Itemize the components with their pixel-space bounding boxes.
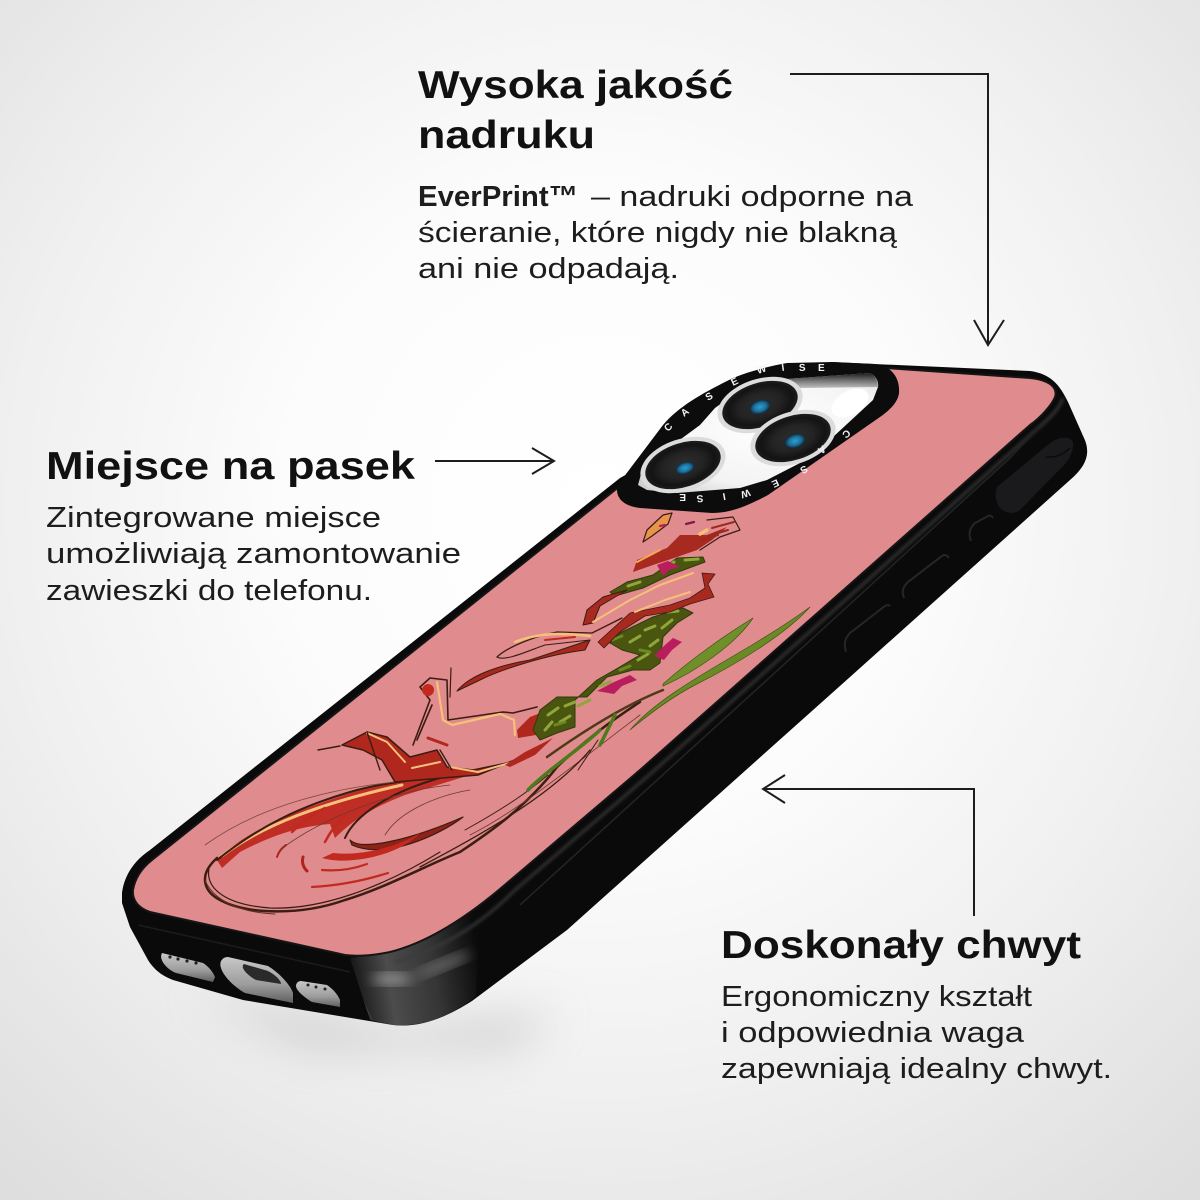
phone shadow [190,995,560,1048]
window inner shadow [740,373,878,395]
body text: zapewniają idealny chwyt. [721,1053,1112,1085]
phone case [122,362,1087,1030]
body text: – nadruki odporne na [591,181,914,213]
callout: strap slot [46,445,554,607]
side button: volume down [845,605,890,652]
side groove [520,420,1045,905]
heading: Miejsce na pasek [46,445,415,488]
pink back panel [133,368,1056,956]
head [633,513,740,572]
side button: volume up [903,555,949,598]
body text: EverPrint™ [418,181,578,213]
callout: grip [721,775,1112,1085]
flowers [597,561,682,694]
body text: ścieranie, które nigdy nie blakną [418,217,898,249]
torso [583,573,715,648]
body text [418,181,914,285]
lens upper [710,367,810,443]
right speaker grille [296,981,340,1007]
garland [533,557,705,740]
brand text lower: CASEWISE [679,427,852,504]
island frame [617,362,899,513]
foreleg strip [457,618,622,691]
arrow to strap slot [435,448,554,474]
illustration: fox with garland [205,513,810,914]
charging port [220,957,293,1003]
callout: print quality [418,64,1004,345]
body text: umożliwiają zamontowanie [46,538,461,570]
tail [205,702,640,914]
bottom edge line [138,925,350,972]
left speaker grille [161,953,215,982]
flash [827,383,873,423]
glass window [638,373,878,493]
lens lower left [633,427,733,503]
heading [418,64,733,157]
hind leg and body [318,668,553,782]
heading: Wysoka jakość [418,64,733,107]
body text: ani nie odpadają. [418,253,679,285]
glossy corner of the case [350,918,476,1026]
arrow to case side [763,775,974,916]
brand text upper: CASEWISE [662,363,825,434]
arrow to camera corner [790,74,1004,345]
strap slot grip [996,438,1073,513]
heading: nadruku [418,114,595,157]
body text: Ergonomiczny kształt [721,981,1032,1013]
side button: mute [970,516,993,541]
grass leaves [528,607,810,790]
rim soft highlight [395,398,1063,962]
body text: zawieszki do telefonu. [46,575,372,607]
lens right [743,400,843,476]
body text: Zintegrowane miejsce [46,502,381,534]
body text [721,981,1112,1085]
body text [46,502,461,607]
body text: i odpowiednia waga [721,1017,1025,1049]
camera island [617,362,899,513]
heading: Doskonały chwyt [721,924,1081,967]
case body silhouette [122,362,1087,1026]
